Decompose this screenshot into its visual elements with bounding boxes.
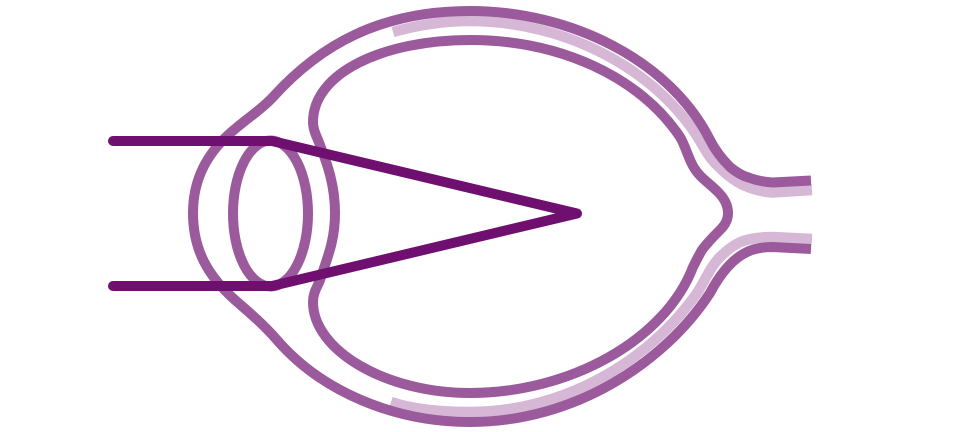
outer eyeball wall [193,11,811,422]
inner eyeball wall [313,40,728,393]
retina highlight: bottom [391,237,812,412]
lens [233,140,308,286]
retina highlight: top [393,21,812,192]
light rays converging [113,141,577,286]
